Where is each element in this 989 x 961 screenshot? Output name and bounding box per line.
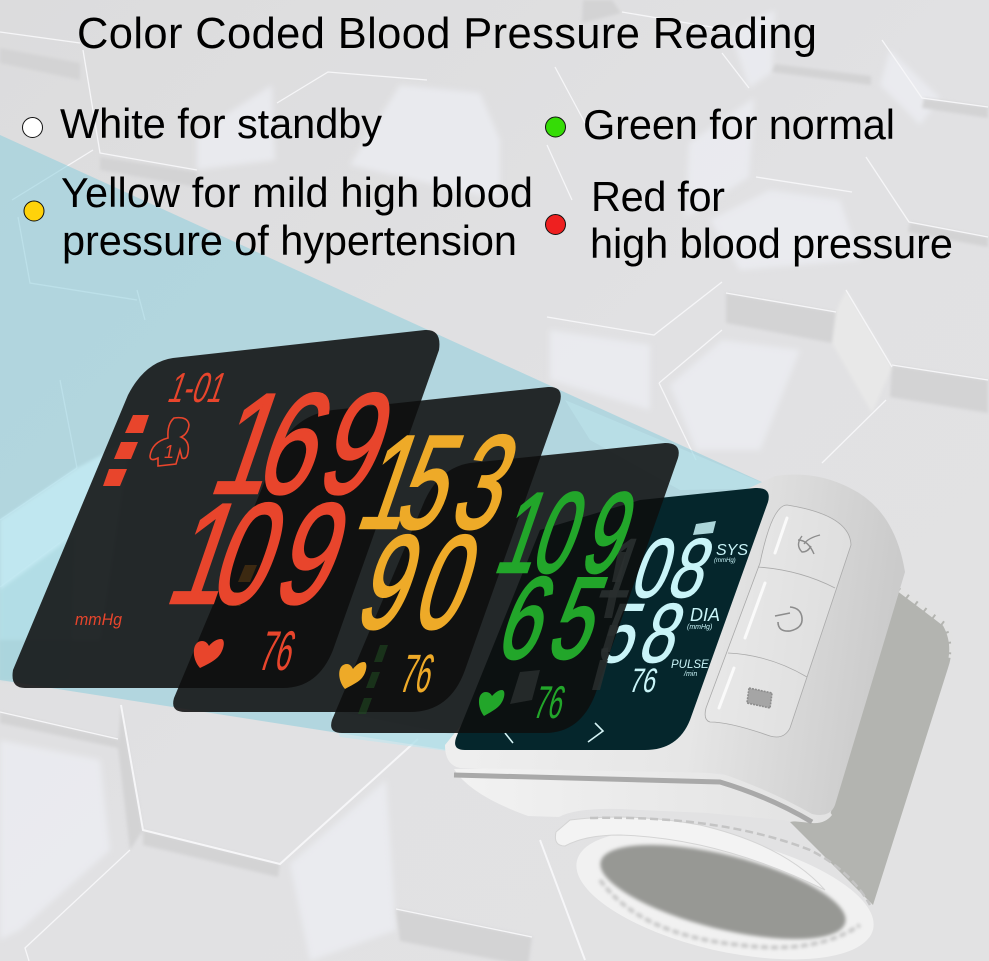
- icon user number: 1: [164, 442, 174, 462]
- button slits: [719, 518, 787, 708]
- orange reading contents: [339, 408, 535, 704]
- cuff stitched rim: [900, 590, 952, 658]
- red signal bars: [103, 415, 149, 486]
- yellow label line 2: pressure of hypertension: [62, 217, 517, 264]
- green systolic 109: 109: [484, 469, 651, 596]
- green diastolic 65: 65: [484, 554, 621, 683]
- screen battery icon: [693, 521, 716, 535]
- icon: red heart: [194, 639, 224, 668]
- red reading contents: [75, 365, 413, 683]
- red diastolic 109: 109: [152, 475, 369, 634]
- red date: 1-01: [163, 365, 233, 412]
- button dividers: [728, 567, 835, 677]
- cuff lower seam: [600, 880, 860, 948]
- panel: red reading: [12, 330, 439, 688]
- screen label PULSE unit: /min: [683, 671, 697, 678]
- shadow seam: [454, 775, 812, 822]
- green dot: [546, 117, 566, 137]
- yellow label line 1: Yellow for mild high blood: [61, 169, 533, 216]
- red label line 1: Red for: [591, 173, 725, 220]
- panel: orange reading: [173, 387, 561, 712]
- screen label SYS unit: (mmHg): [714, 558, 736, 564]
- screen reading 58: 58: [589, 587, 696, 681]
- legend: white standby: [22, 100, 382, 147]
- icon: power button: [775, 607, 802, 631]
- button outline: [705, 505, 851, 737]
- screen: [455, 488, 769, 750]
- orange pulse 76: 76: [395, 643, 440, 704]
- legend: green normal: [546, 101, 895, 148]
- icon: orange heart: [339, 662, 366, 689]
- title: Color Coded Blood Pressure Reading: [77, 10, 817, 58]
- panel: green reading: [331, 443, 679, 733]
- wrist cuff: [555, 588, 952, 961]
- cuff right seam: [590, 818, 870, 905]
- teal projection wedge: [0, 135, 780, 755]
- cuff fabric outer: [790, 588, 951, 905]
- cuff inner fabric: [592, 826, 854, 958]
- cuff ring: [564, 806, 886, 961]
- icon: green heart: [479, 690, 504, 716]
- screen label DIA unit: (mmHg): [687, 624, 712, 631]
- monitor body: [445, 474, 905, 823]
- screen reading 108: 108: [589, 522, 725, 616]
- green pulse 76: 76: [530, 677, 570, 728]
- screen label SYS: SYS: [716, 542, 748, 559]
- red label line 2: high blood pressure: [590, 220, 953, 267]
- icon: battery button: [747, 688, 772, 708]
- cuff overlapping band: [555, 817, 825, 890]
- orange systolic 153: 153: [343, 408, 535, 557]
- yellow dot: [24, 201, 44, 221]
- red systolic 169: 169: [196, 365, 413, 524]
- green reading contents: [479, 469, 651, 728]
- housing shell: [445, 474, 905, 815]
- screen reading pulse 76: 76: [626, 662, 661, 700]
- screen chevrons: [505, 723, 603, 743]
- red unit: mmHg: [75, 610, 123, 629]
- red pulse 76: 76: [254, 621, 301, 683]
- white dot: [22, 118, 42, 138]
- red dot: [546, 214, 566, 234]
- green label: Green for normal: [583, 101, 895, 148]
- orange diastolic 90: 90: [342, 508, 498, 657]
- icon: user: [150, 418, 189, 466]
- white label: White for standby: [60, 100, 382, 147]
- screen label PULSE: PULSE: [671, 659, 709, 671]
- legend: red high: [546, 173, 953, 267]
- legend: yellow mild: [24, 169, 533, 264]
- ghost segments seen through panels: [228, 552, 626, 714]
- lower housing strip: [454, 765, 832, 823]
- screen label DIA: DIA: [690, 605, 720, 625]
- icon: memory button: [798, 535, 820, 554]
